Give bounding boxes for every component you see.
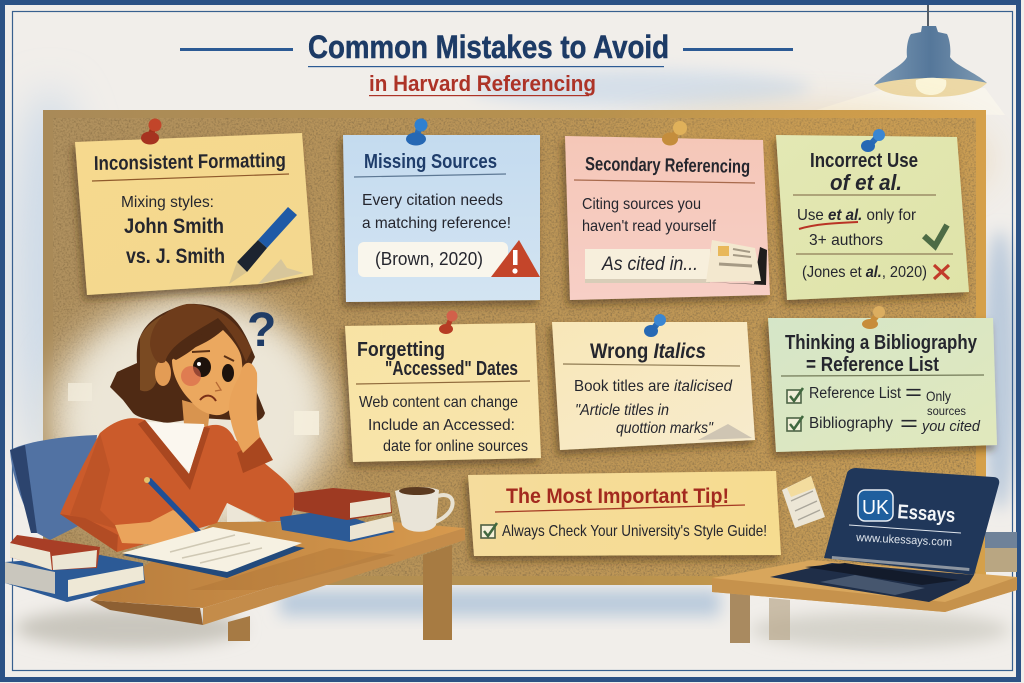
face — [172, 330, 243, 415]
note: Forgetting Accessed Dates: Forgetting — [357, 339, 445, 361]
citation pill — [358, 242, 508, 277]
checklist row: reference list: sources — [927, 404, 966, 418]
checklist row: reference list: Only — [926, 388, 951, 404]
note: Thinking a Bibliography = Reference List: Thinking a Bibliography — [785, 332, 978, 354]
note: Inconsistent Formatting — [75, 133, 313, 295]
note: The Most Important Tip — [468, 471, 781, 556]
pin: gold — [662, 121, 687, 146]
laptop — [770, 468, 999, 602]
hair back — [110, 304, 265, 423]
pin: blue — [644, 314, 666, 337]
eyes, blush and mouth — [181, 351, 234, 401]
question mark: ? — [247, 304, 276, 357]
note: Incorrect Use of et al.: Use et al. only for — [797, 207, 917, 224]
icon: fountain pen — [229, 207, 297, 284]
icon: check mark — [924, 225, 947, 246]
note: Secondary Referencing: Citing sources you — [582, 196, 701, 213]
note: Wrong Italics: quottion marks" — [616, 420, 714, 437]
checklist row: reference list: = — [905, 380, 922, 405]
pin: gold — [862, 306, 885, 329]
checklist row: bibliography: = — [900, 411, 918, 436]
citation pill: (Brown, 2020) — [375, 249, 483, 269]
note: Forgetting Accessed Dates: "Accessed" Dates — [385, 358, 518, 380]
note: Thinking a Bibliography = Reference List — [768, 318, 997, 452]
checklist row: bibliography — [787, 411, 981, 436]
note: Secondary Referencing: Secondary Referencing — [585, 154, 750, 178]
checklist row: reference list: Reference List — [809, 385, 902, 402]
checklist row: bibliography: you cited — [921, 418, 981, 435]
coffee cup — [395, 487, 453, 532]
note: The Most Important Tip: Always Check Your University's Style Guide! — [502, 523, 767, 540]
logo: UK Essays — [858, 490, 956, 527]
note: Forgetting Accessed Dates: Include an Accessed: — [368, 417, 515, 434]
checklist row: reference list — [787, 380, 966, 418]
note: Missing Sources: Missing Sources — [364, 151, 497, 173]
title — [180, 29, 793, 96]
pale gap under arm — [227, 503, 262, 522]
sweater — [60, 418, 297, 552]
note: The Most Important Tip: The Most Important Tip! — [506, 485, 729, 508]
shirt — [147, 422, 206, 472]
icon: checkbox — [481, 523, 497, 538]
hand holding pen — [115, 477, 210, 545]
neck — [182, 400, 210, 448]
chair — [10, 435, 97, 540]
cork board — [43, 110, 990, 585]
student at desk — [10, 304, 297, 552]
checklist row: bibliography: Bibliography — [809, 415, 893, 432]
citation box — [585, 249, 710, 283]
note: Wrong Italics — [552, 322, 755, 450]
note: Wrong Italics: Wrong Italics — [590, 340, 706, 363]
title: in Harvard Referencing — [369, 71, 596, 96]
icon: red cross — [934, 265, 949, 279]
note: Inconsistent Formatting: Inconsistent Formatting — [94, 150, 286, 175]
note: Incorrect Use of et al. — [776, 135, 969, 300]
note: Secondary Referencing: haven't read yourself — [582, 218, 717, 235]
note: Missing Sources — [343, 135, 540, 302]
pin: red small — [439, 310, 458, 334]
hanging lamp — [810, 5, 1005, 115]
logo: UK Essays: UK — [862, 497, 890, 519]
notebook — [122, 527, 305, 578]
note: Thinking a Bibliography = Reference List: = Reference List — [806, 354, 939, 376]
books stack on desk — [280, 488, 395, 542]
logo: UK Essays: Essays — [897, 501, 956, 527]
citation box: As cited in... — [601, 254, 698, 275]
pinned paper scrap — [782, 476, 825, 528]
icon: open book — [706, 240, 767, 285]
note: Incorrect Use of et al.: of et al. — [830, 170, 902, 195]
note: Inconsistent Formatting: Mixing styles: — [121, 194, 214, 211]
note: Forgetting Accessed Dates: date for online sources — [383, 438, 528, 455]
icon: warning triangle — [491, 240, 540, 277]
note: Secondary Referencing — [565, 136, 770, 300]
hair fringe — [150, 304, 252, 363]
laptop: www.ukessays.com — [855, 532, 952, 549]
raised hand and arm — [229, 363, 260, 453]
note: Forgetting Accessed Dates: Web content can change — [359, 394, 518, 411]
pin: red — [141, 118, 162, 144]
pin: blue — [406, 118, 428, 146]
note: Missing Sources: a matching reference! — [362, 215, 511, 232]
desk: right — [712, 532, 1017, 643]
note: Wrong Italics: "Article titles in — [575, 402, 669, 419]
desk: left — [90, 522, 465, 641]
note: Forgetting Accessed Dates — [345, 323, 541, 462]
title: Common Mistakes to Avoid — [308, 29, 669, 65]
note: Wrong Italics: Book titles are italicised — [574, 378, 733, 395]
pin: blue tilted — [861, 129, 885, 152]
note: Missing Sources: Every citation needs — [362, 192, 503, 209]
note: Incorrect Use of et al.: (Jones et al., 2020) — [802, 264, 927, 281]
note: Inconsistent Formatting: John Smith — [124, 215, 224, 238]
note: Inconsistent Formatting: vs. J. Smith — [126, 245, 225, 268]
note: Incorrect Use of et al.: Incorrect Use — [810, 150, 918, 172]
note: Incorrect Use of et al.: 3+ authors — [809, 232, 883, 249]
books stack left — [5, 535, 145, 602]
